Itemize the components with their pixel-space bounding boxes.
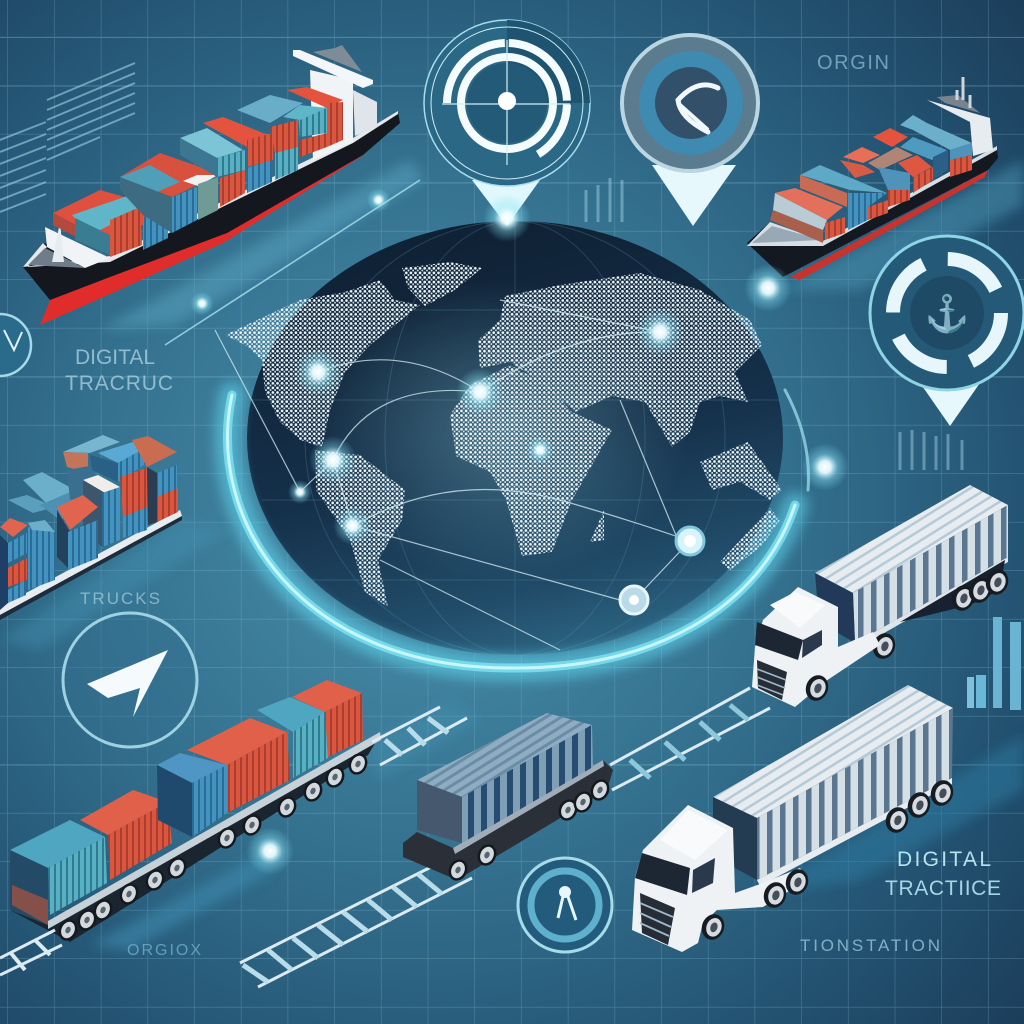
glowing nodes — [288, 308, 704, 614]
water wakes — [0, 160, 1024, 950]
freight train flatcars — [10, 680, 381, 944]
trailer — [815, 485, 1008, 593]
glow accents — [190, 188, 849, 875]
wake light beam — [165, 180, 420, 345]
label: origin bottom: ORGIOX — [127, 942, 201, 959]
container stack left — [0, 435, 182, 620]
truck upper right — [752, 485, 1012, 707]
grey container wagon — [403, 713, 613, 884]
faint chart marks — [0, 63, 962, 470]
trailer — [713, 685, 953, 818]
route lines — [215, 300, 690, 650]
label: tractiice right: TRACTIICE — [885, 877, 1001, 900]
superstructure — [353, 90, 377, 136]
small badge left — [0, 314, 31, 376]
cab — [632, 805, 807, 952]
containers — [10, 820, 105, 868]
label: transportation: TIONSTATION — [800, 936, 940, 955]
cargo ship left — [23, 45, 400, 325]
globe — [215, 221, 783, 655]
wheels — [55, 916, 81, 944]
pin: location — [622, 35, 758, 226]
pin: anchor: ⚓ — [925, 293, 969, 334]
hull red keel — [40, 153, 367, 325]
pin: anchor — [870, 236, 1024, 426]
globe grid lines — [250, 221, 780, 655]
deck beam — [48, 732, 381, 929]
superstructure — [927, 100, 993, 156]
hull — [23, 112, 400, 300]
truck lower right — [632, 685, 957, 952]
label: tractruc left: TRACRUC — [65, 372, 173, 395]
arrow badge — [63, 613, 197, 747]
label: origin: ORGIN — [817, 52, 889, 74]
label: digital right: DIGITAL — [897, 848, 991, 871]
chassis — [10, 735, 380, 942]
bar chart right edge — [967, 617, 1021, 710]
bottom badge — [518, 858, 612, 952]
label: digital tracking left: DIGITAL — [75, 346, 155, 369]
container — [417, 713, 592, 797]
containers — [770, 115, 972, 243]
pin: target — [424, 20, 590, 242]
cab — [752, 587, 880, 707]
dotted continents — [225, 262, 782, 607]
chassis — [403, 760, 613, 880]
bow deck — [28, 248, 85, 268]
glowing orbit ring — [228, 390, 809, 668]
cargo ship right — [747, 77, 998, 280]
containers — [53, 87, 343, 257]
label: trucks: TRUCKS — [80, 589, 160, 608]
railway tracks — [0, 688, 770, 987]
